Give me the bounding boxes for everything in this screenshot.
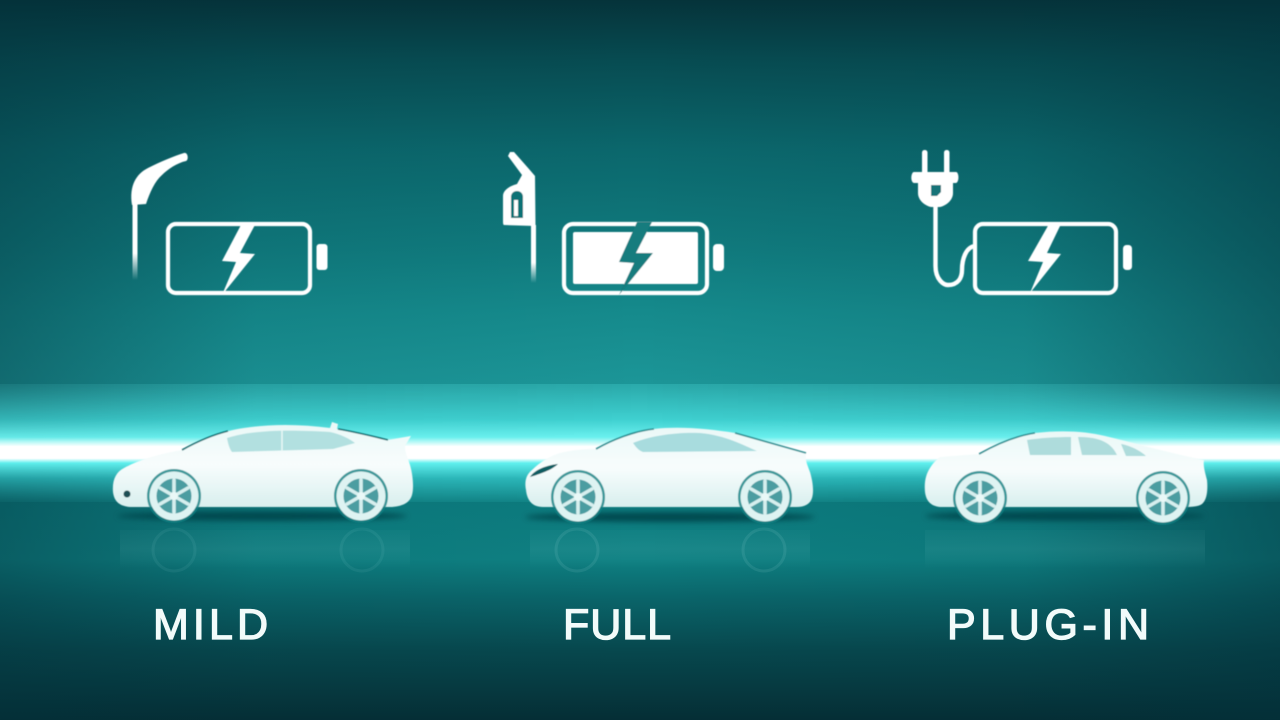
- icon: curved fuel nozzle: [131, 153, 188, 280]
- car fog lamp: [124, 490, 130, 498]
- car body: [113, 422, 413, 523]
- car: full hybrid sedan: [525, 428, 815, 571]
- car front wheel: [953, 471, 1007, 525]
- label: PLUG-IN: PLUG-IN: [947, 601, 1149, 649]
- icon: empty battery: [168, 223, 328, 295]
- label: MILD: MILD: [153, 601, 268, 649]
- car rear wheel: [738, 470, 792, 524]
- car shadow: [117, 511, 407, 521]
- icon: fuel pump nozzle: [503, 152, 536, 283]
- car windows: [1027, 437, 1146, 456]
- car reflection: [925, 530, 1205, 568]
- icon: electric plug with cable: [911, 150, 975, 285]
- car reflection: [120, 529, 410, 571]
- car body: [925, 431, 1207, 525]
- car: mild hybrid hatchback: [113, 422, 413, 571]
- icon group: plug-in cable and battery: [911, 150, 1132, 293]
- car roof line: [979, 433, 1035, 454]
- glowing horizon light band: [0, 384, 1280, 502]
- car roof line: [182, 429, 388, 450]
- background: upper teal gradient: [0, 0, 1280, 385]
- car roof line: [596, 429, 806, 453]
- car reflection: [530, 529, 810, 571]
- light band: bottom side shading: [0, 462, 1280, 502]
- icon: full battery: [564, 222, 724, 295]
- background: lower floor gradient: [0, 500, 1280, 720]
- car shadow: [525, 512, 815, 522]
- icon group: mild hybrid fuel nozzle and battery: [131, 153, 328, 295]
- car shadow: [925, 511, 1205, 521]
- background: upper side vignette: [0, 0, 1280, 385]
- icon group: full hybrid fuel pump and battery: [503, 152, 724, 295]
- label: FULL: FULL: [563, 601, 671, 649]
- car rear wheel: [334, 469, 388, 523]
- car headlight: [530, 464, 558, 477]
- car windows: [633, 433, 757, 452]
- icon: empty battery: [975, 224, 1132, 293]
- car front wheel: [551, 470, 605, 524]
- car windows: [227, 431, 355, 452]
- background: lower side vignette: [0, 500, 1280, 720]
- car body: [525, 428, 813, 524]
- car rear wheel: [1136, 471, 1190, 525]
- car front wheel: [147, 469, 201, 523]
- car: plug-in hybrid sedan: [925, 431, 1207, 568]
- light band: top side shading: [0, 384, 1280, 442]
